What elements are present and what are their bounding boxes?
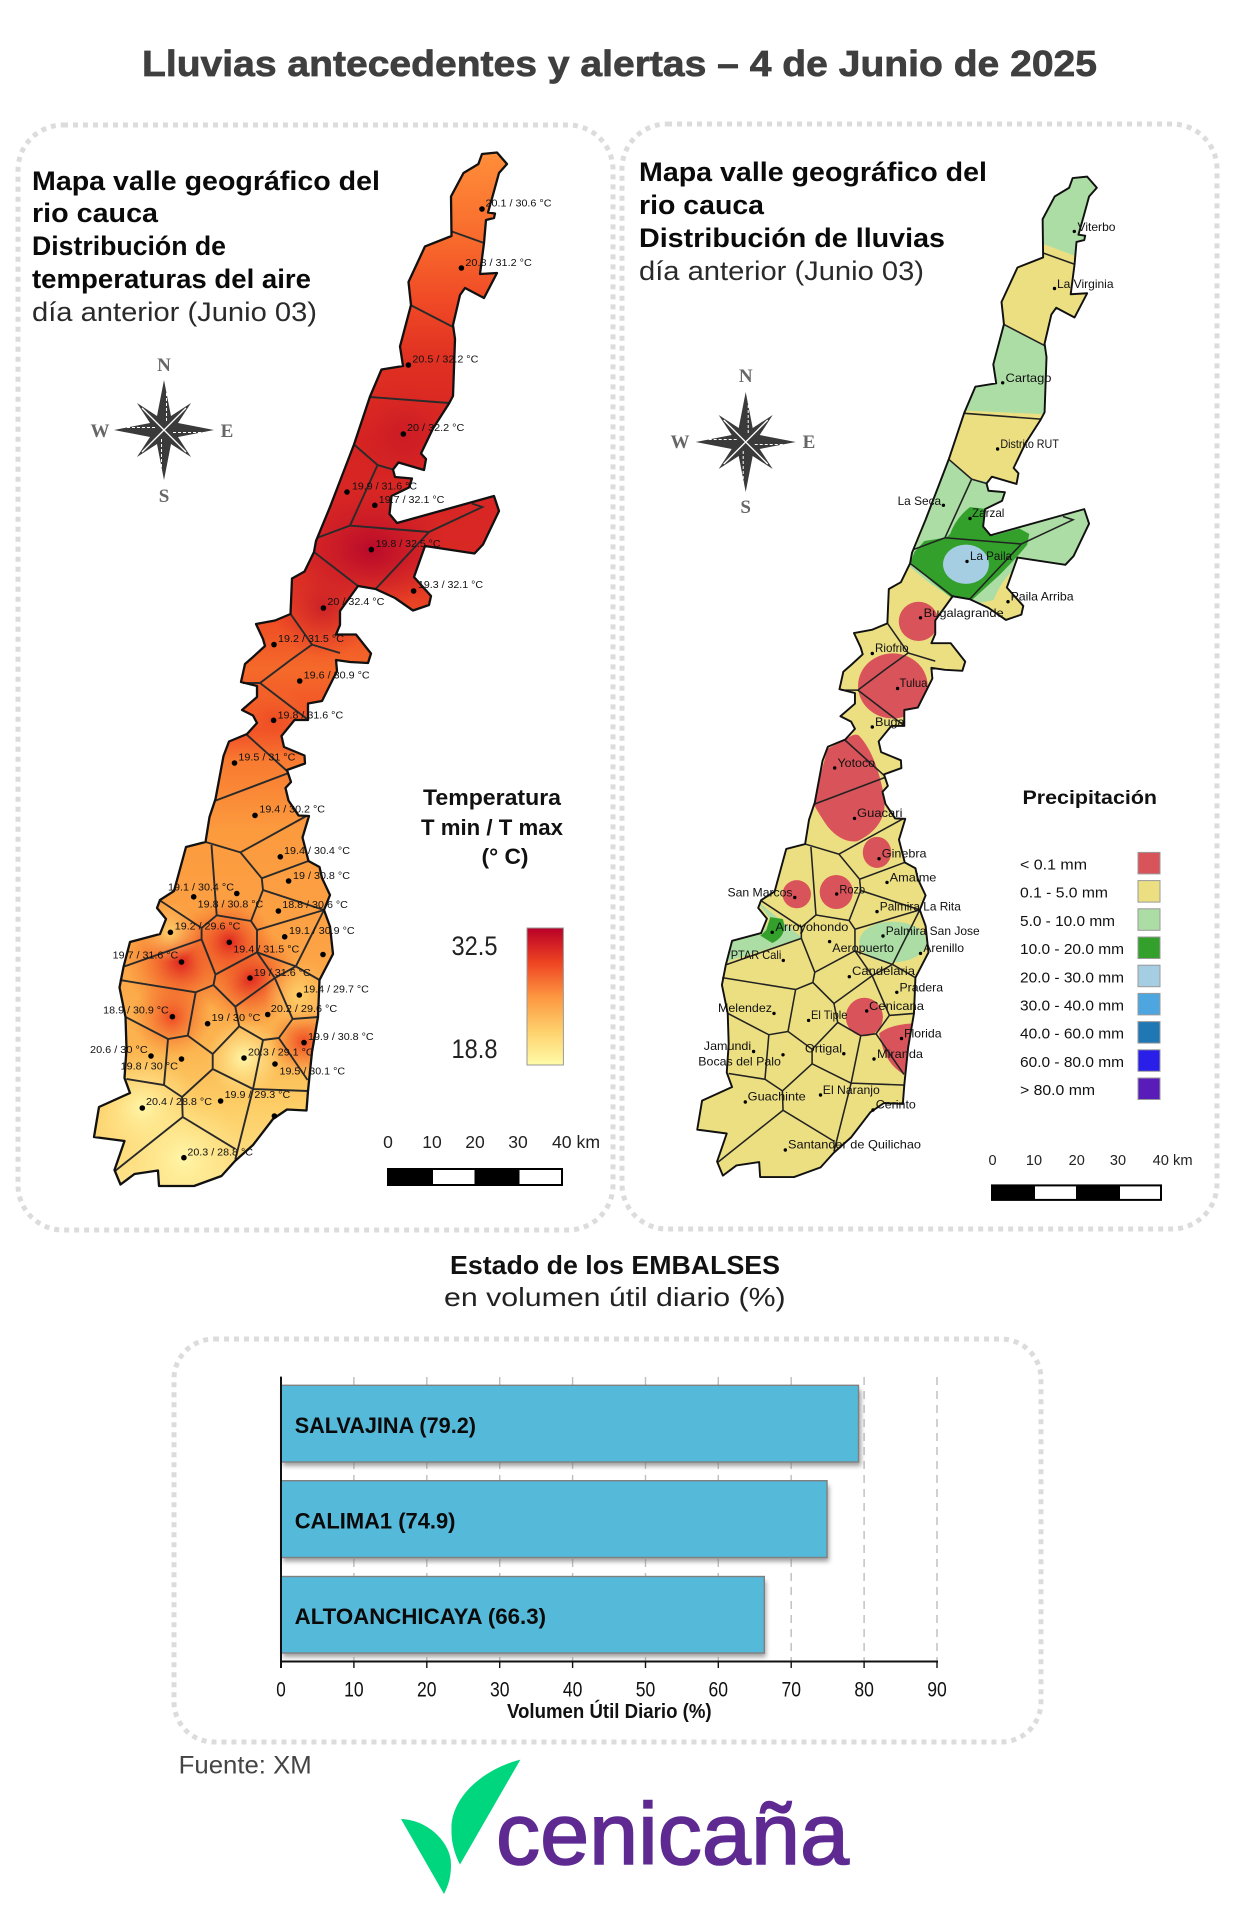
station labels: place names: El Naranjo: [823, 1083, 880, 1097]
station labels: place names: Melendez: [718, 1001, 772, 1015]
heading: temperature map: Distribución de: [32, 231, 226, 261]
heading: rainfall map: [639, 157, 987, 286]
axis tick labels: 10: [344, 1679, 364, 1702]
heading: temperature map: temperaturas del aire: [32, 264, 311, 294]
station labels: min and max temperature: 19.7 / 31.6 °C: [113, 950, 179, 962]
station labels: place names: Bugalagrande: [924, 606, 1004, 620]
bar: Calima1: CALIMA1 (74.9): [295, 1508, 456, 1533]
station labels: place names: La Seca: [898, 494, 941, 508]
station labels: place names: La Virginia: [1057, 277, 1114, 291]
station labels: place names: Viterbo: [1078, 220, 1116, 234]
scale bar: temperature map: 30: [508, 1132, 528, 1152]
axis title: Volumen Útil Diario (%): [507, 1699, 712, 1723]
scale bar: temperature map: 0: [383, 1132, 393, 1152]
station labels: place names: Guacari: [857, 806, 902, 820]
station labels: place names: Ginebra: [882, 846, 927, 860]
station labels: place names: Zarzal: [972, 506, 1004, 520]
scale bar: temperature map: [383, 1132, 600, 1185]
station labels: place names: Palmira San Jose: [886, 924, 980, 938]
station labels: min and max temperature: 19.7 / 32.1 °C: [379, 494, 445, 506]
legend: precipitation classes: 10.0 - 20.0 mm: [1020, 941, 1124, 958]
station labels: min and max temperature: 19.9 / 29.3 °C: [225, 1089, 291, 1101]
station labels: min and max temperature: 20.6 / 30 °C: [90, 1044, 148, 1056]
station labels: min and max temperature: 20.2 / 29.6 °C: [271, 1003, 338, 1015]
legend: temperature colour scale: [421, 785, 564, 1065]
heading: temperature map: rio cauca: [32, 198, 159, 228]
station labels: place names: Paila Arriba: [1011, 590, 1074, 604]
station labels: min and max temperature: 19.5 / 30.1 °C: [280, 1065, 346, 1077]
heading: reservoirs: en volumen útil diario (%): [444, 1282, 786, 1312]
station labels: min and max temperature: 19.4 / 29.7 °C: [303, 984, 369, 996]
station labels: place names: Arenillo: [923, 941, 964, 955]
chart axes: [280, 1377, 938, 1668]
logo: Cenicaña: cenicaña: [496, 1786, 850, 1883]
station labels: min and max temperature: 18.9 / 30.9 °C: [103, 1005, 169, 1017]
legend: precipitation classes: 0.1 - 5.0 mm: [1020, 885, 1108, 902]
station labels: place names: Cerinto: [876, 1098, 916, 1112]
heading: reservoirs: Estado de los EMBALSES: [450, 1250, 780, 1280]
station labels: min and max temperature: 20.3 / 28.8 °C: [187, 1146, 253, 1158]
icon: compass rose: S: [740, 497, 751, 518]
axis tick labels: 80: [854, 1679, 874, 1702]
station points: rainfall: [744, 230, 1076, 1152]
station labels: min and max temperature: 19.6 / 30.9 °C: [304, 670, 370, 682]
scale bar: rainfall map: 40 km: [1153, 1153, 1193, 1169]
station labels: min and max temperature: 20.1 / 30.6 °C: [486, 198, 552, 210]
station labels: min and max temperature: 19.9 / 31.6 °C: [352, 480, 417, 492]
station labels: place names: Arroyohondo: [775, 920, 849, 934]
axis tick labels: [276, 1679, 947, 1702]
station labels: min and max temperature: 19.1 / 30.4 °C: [168, 882, 234, 894]
station labels: place names: La Paila: [970, 549, 1012, 563]
bar: Altoanchicaya: [281, 1576, 766, 1657]
axis tick labels: 20: [417, 1679, 437, 1702]
station labels: place names: Candelaria: [852, 964, 915, 978]
station labels: min and max temperature: 19.8 / 30.8 °C: [198, 898, 264, 910]
legend: precipitation classes: 30.0 - 40.0 mm: [1020, 998, 1124, 1014]
legend: precipitation classes: [1020, 788, 1160, 1100]
heading: temperature map: día anterior (Junio 03): [32, 297, 317, 327]
station labels: place names: Santander de Quilichao: [788, 1138, 921, 1152]
legend: precipitation classes: 20.0 - 30.0 mm: [1020, 969, 1124, 986]
station labels: min and max temperature: 20.8 / 31.2 °C: [465, 257, 532, 269]
station labels: min and max temperature: 20.5 / 32.2 °C: [412, 354, 479, 366]
legend: precipitation classes: < 0.1 mm: [1020, 856, 1087, 874]
heading: rainfall map: día anterior (Junio 03): [639, 256, 924, 286]
station labels: place names: Rozo: [839, 882, 865, 896]
bar: Altoanchicaya: ALTOANCHICAYA (66.3): [295, 1604, 546, 1629]
icon: compass rose: W: [670, 432, 690, 453]
bar: Salvajina: SALVAJINA (79.2): [295, 1413, 476, 1438]
station labels: min and max temperature: 19.9 / 30.8 °C: [308, 1031, 374, 1043]
heading: temperature map: Mapa valle geográfico del: [32, 166, 380, 196]
station labels: min and max temperature: 19.4 / 30.2 °C: [259, 804, 325, 816]
icon: compass rose: E: [221, 421, 233, 442]
bar: Salvajina: [281, 1385, 861, 1466]
station labels: place names: Cenicana: [869, 999, 924, 1013]
station labels: place names: Yotoco: [838, 756, 875, 770]
heading: rainfall map: rio cauca: [639, 190, 765, 220]
axis tick labels: 70: [781, 1679, 801, 1702]
station labels: place names: [698, 220, 1116, 1152]
legend: temperature colour scale: Temperatura: [423, 785, 562, 810]
station labels: place names: Amaime: [890, 871, 937, 885]
axis tick labels: 30: [490, 1679, 509, 1702]
legend: precipitation classes: 5.0 - 10.0 mm: [1020, 913, 1115, 930]
station labels: min and max temperature: 19.2 / 29.6 °C: [175, 921, 241, 933]
station labels: place names: San Marcos: [728, 886, 792, 900]
heading: temperature map: [32, 166, 380, 327]
axis tick labels: 0: [276, 1679, 286, 1702]
station labels: min and max temperature: 19.1 / 30.9 °C: [289, 925, 355, 937]
legend: precipitation classes: 40.0 - 60.0 mm: [1020, 1026, 1124, 1043]
scale bar: temperature map: 40 km: [552, 1132, 600, 1152]
icon: compass rose: S: [159, 486, 169, 507]
station labels: place names: PTAR Cali: [731, 948, 781, 962]
legend: precipitation classes: > 80.0 mm: [1020, 1082, 1095, 1099]
station labels: min and max temperature: 19.2 / 31.5 °C: [278, 633, 344, 645]
station labels: min and max temperature: 19.4 / 30.4 °C: [284, 845, 350, 857]
heading: rainfall map: Mapa valle geográfico del: [639, 157, 987, 187]
station labels: place names: Cartago: [1006, 371, 1052, 385]
station labels: place names: Riofrio: [875, 641, 909, 655]
station labels: place names: Miranda: [877, 1047, 923, 1061]
station labels: min and max temperature: 18.8 / 30.6 °C: [282, 899, 348, 911]
scale bar: rainfall map: 0: [988, 1153, 997, 1169]
station labels: min and max temperature: 19 / 31.6 °C: [254, 967, 311, 979]
station labels: place names: Tulua: [900, 676, 928, 690]
station labels: min and max temperature: 20.4 / 28.8 °C: [146, 1096, 212, 1108]
icon: compass rose: [90, 355, 233, 507]
heading: reservoirs: [444, 1250, 786, 1312]
station labels: min and max temperature: 19.5 / 31 °C: [238, 752, 296, 764]
panel: temperature map: [18, 125, 613, 1230]
station labels: min and max temperature: 19 / 30.8 °C: [293, 870, 350, 882]
legend: precipitation classes: 60.0 - 80.0 mm: [1020, 1054, 1124, 1071]
axis tick labels: 40: [563, 1679, 582, 1702]
station labels: place names: Ortigal: [805, 1042, 842, 1056]
scale bar: temperature map: 20: [465, 1132, 485, 1152]
scale bar: rainfall map: [988, 1153, 1193, 1200]
station labels: place names: Guachinte: [748, 1090, 806, 1104]
station labels: min and max temperature: [90, 198, 552, 1158]
legend: temperature colour scale: (° C): [482, 844, 528, 869]
station labels: place names: Distrito RUT: [1000, 437, 1059, 451]
map: air temperature distribution: [80, 140, 520, 1220]
axis tick labels: 90: [927, 1679, 947, 1702]
axis tick labels: 50: [636, 1679, 655, 1702]
scale bar: rainfall map: 20: [1069, 1153, 1085, 1169]
panel: reservoirs chart: [174, 1339, 1041, 1742]
station labels: place names: Bocas del Palo: [698, 1054, 781, 1068]
station labels: place names: Pradera: [900, 980, 943, 994]
legend: precipitation classes: Precipitación: [1022, 788, 1157, 809]
icon: compass rose: W: [90, 421, 110, 442]
station labels: min and max temperature: 19.8 / 31.6 °C: [278, 710, 344, 722]
source note: Fuente: XM: [179, 1752, 312, 1780]
station labels: min and max temperature: 19.3 / 32.1 °C: [418, 579, 483, 591]
legend: temperature colour scale: 32.5: [452, 931, 498, 961]
station labels: place names: El Tiple: [811, 1008, 848, 1022]
station labels: min and max temperature: 20 / 32.2 °C: [407, 422, 465, 434]
bar: Calima1: [281, 1481, 829, 1562]
station labels: min and max temperature: 19.4 / 31.5 °C: [233, 944, 300, 956]
scale bar: temperature map: 10: [422, 1132, 442, 1152]
station labels: place names: Aeropuerto: [832, 941, 894, 955]
station labels: place names: Florida: [904, 1027, 942, 1041]
map: rainfall distribution: [696, 176, 1098, 1178]
station labels: min and max temperature: 19.8 / 30 °C: [121, 1060, 178, 1072]
station labels: place names: Buga: [875, 715, 905, 729]
scale bar: rainfall map: 10: [1026, 1153, 1042, 1169]
station labels: min and max temperature: 20.3 / 29.1 °C: [248, 1046, 314, 1058]
icon: compass rose: [670, 366, 815, 518]
station labels: min and max temperature: 19 / 30 °C: [212, 1012, 261, 1024]
heading: rainfall map: Distribución de lluvias: [639, 223, 945, 253]
scale bar: rainfall map: 30: [1110, 1153, 1126, 1169]
station labels: min and max temperature: 19.8 / 32.5 °C: [376, 538, 441, 550]
station points: temperature: [140, 206, 485, 1160]
icon: compass rose: N: [739, 366, 753, 387]
legend: temperature colour scale: 18.8: [452, 1034, 498, 1064]
title: Lluvias antecedentes y alertas – 4 de Junio de 2025: [142, 43, 1097, 84]
station labels: place names: Jamundi: [704, 1039, 751, 1053]
icon: compass rose: E: [803, 432, 815, 453]
station labels: place names: Palmira La Rita: [880, 900, 961, 914]
legend: temperature colour scale: T min / T max: [421, 815, 564, 840]
axis tick labels: 60: [709, 1679, 728, 1702]
icon: compass rose: N: [157, 355, 171, 376]
station labels: min and max temperature: 20 / 32.4 °C: [327, 596, 385, 608]
panel: rainfall map: [622, 124, 1217, 1229]
logo: Cenicaña: [401, 1760, 850, 1894]
